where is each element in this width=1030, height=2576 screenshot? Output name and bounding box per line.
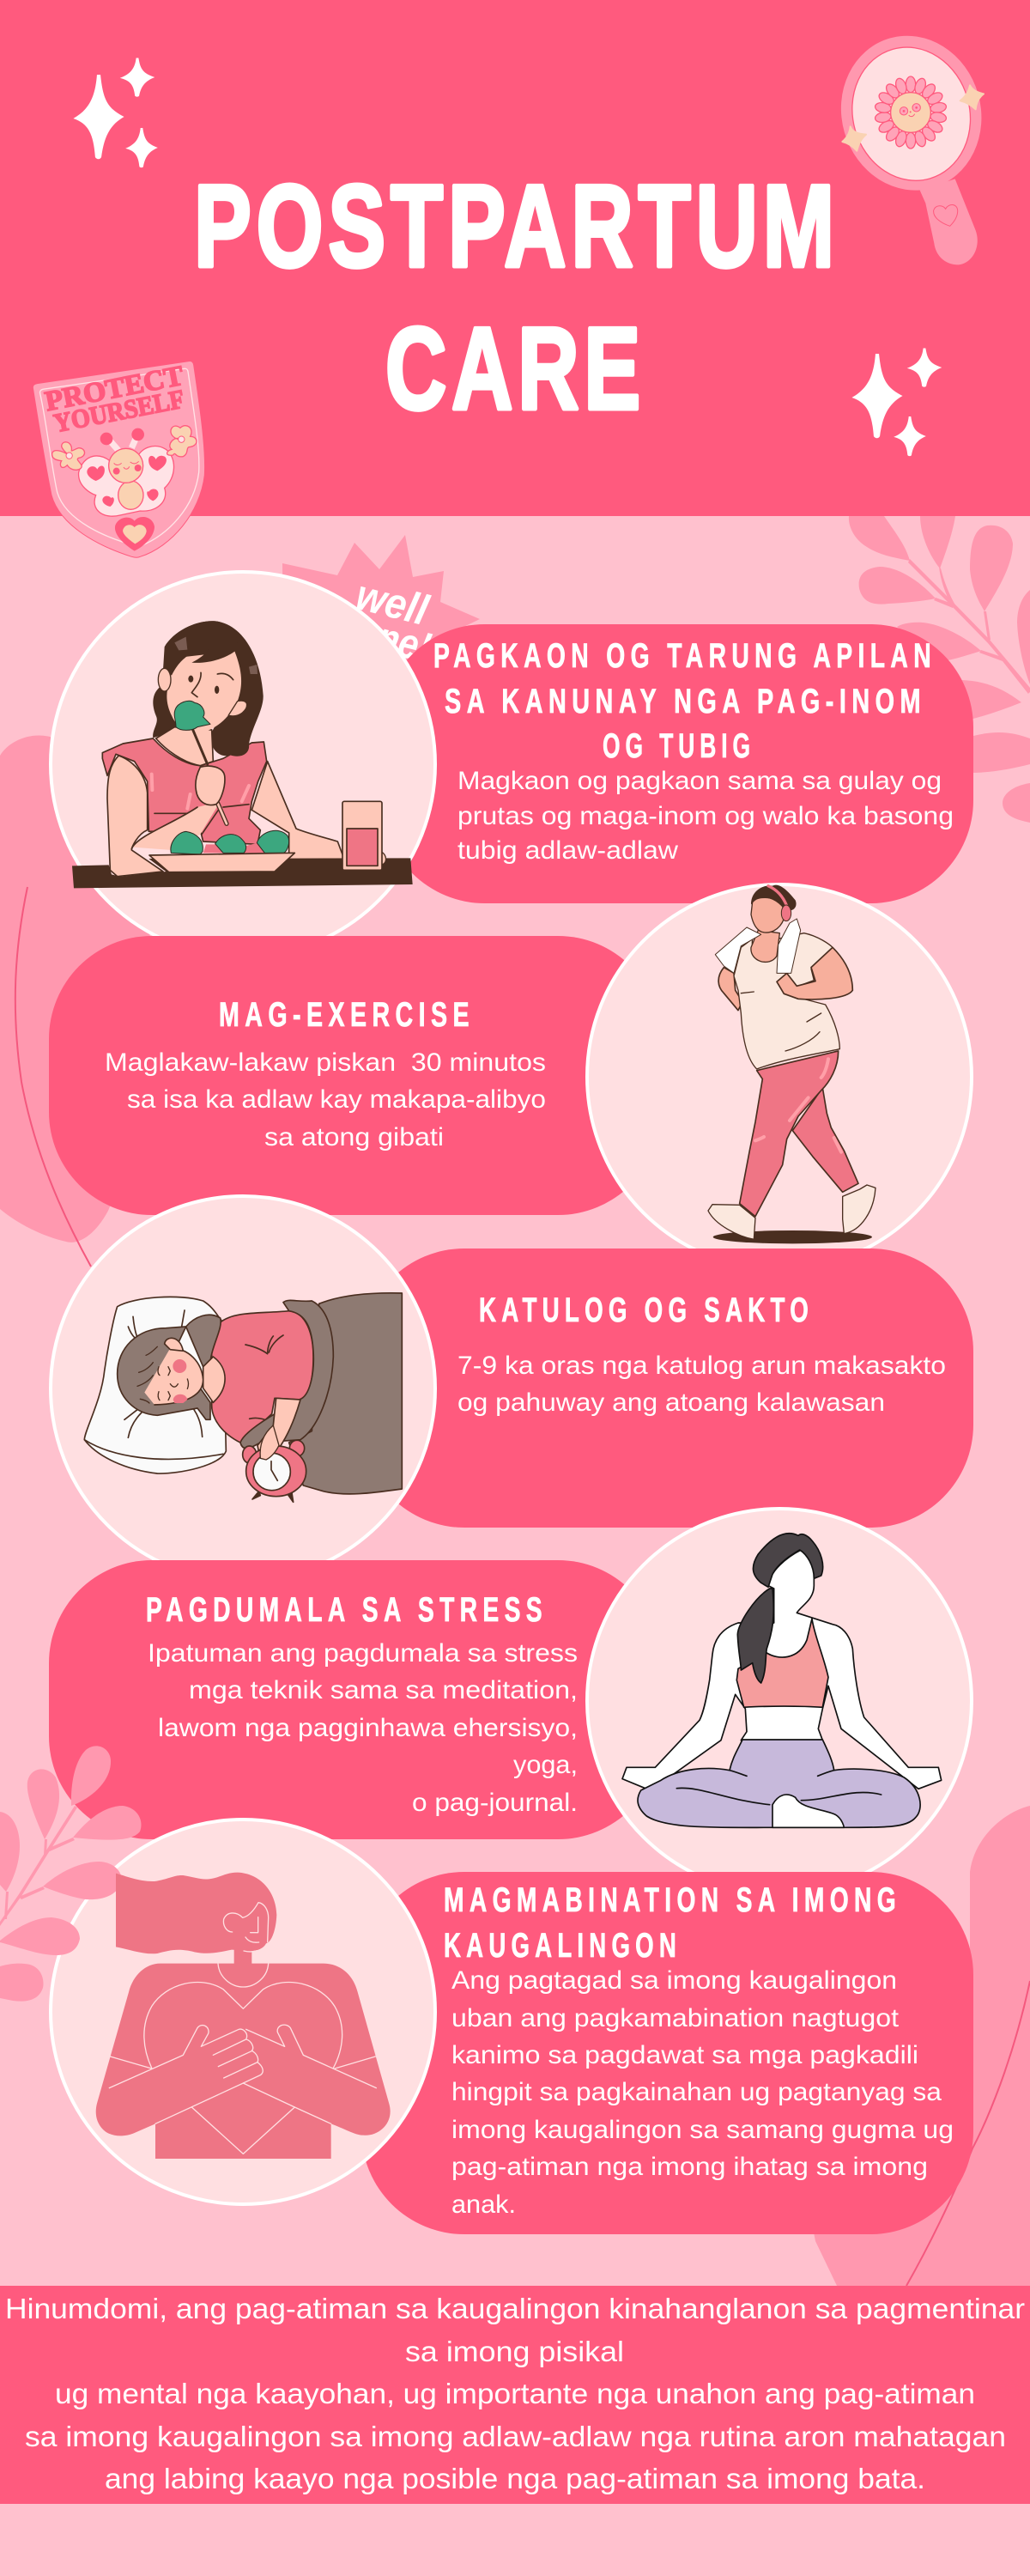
leggings [638, 1740, 920, 1827]
hand [196, 766, 225, 805]
card 4 body: yoga, [513, 1751, 578, 1779]
card 5 body: imong kaugalingon sa samang gugma ug [451, 2116, 954, 2144]
wing hearts [87, 466, 105, 481]
butterfly antennae [109, 435, 137, 451]
illustration: woman hugging heart [96, 1873, 391, 2159]
mirror handle [920, 179, 978, 264]
clock feet [252, 1492, 294, 1502]
eyes, brow, nose [188, 676, 193, 683]
card 5 heading: KAUGALINGON [444, 1927, 682, 1965]
butterfly body [118, 481, 143, 509]
arm [258, 1398, 300, 1460]
hand on clock [260, 1425, 279, 1460]
neck [234, 1929, 251, 1965]
illustration: woman walking [708, 885, 876, 1243]
card 5 body [451, 1966, 954, 2219]
card 2 body: Maglakaw-lakaw piskan 30 minutos [105, 1048, 546, 1077]
closing note text: Hinumdomi, ang pag-atiman sa kaugalingon kinahanglanon sa pagmentinar [5, 2293, 1025, 2324]
hair [753, 1534, 823, 1587]
card 1 heading [433, 637, 936, 765]
card 5 body: hingpit sa pagkainahan ug pagtanyag sa [451, 2078, 942, 2106]
card 4: stress management [49, 1560, 661, 1839]
leaves: top right [849, 516, 1030, 823]
closing note band [0, 2286, 1030, 2504]
card 2 heading: MAG-EXERCISE [219, 996, 475, 1034]
badge text: PROTECT [43, 361, 186, 417]
crop top [736, 1619, 828, 1707]
background curve line: bottom right [906, 1981, 1030, 2286]
shirt [212, 1311, 313, 1443]
card 4 body: o pag-journal. [412, 1789, 578, 1817]
flower petals [875, 76, 947, 149]
hand by the glass [380, 852, 386, 865]
card 1: food and water [382, 624, 973, 903]
card 5 heading [444, 1881, 901, 1965]
left arm [718, 968, 742, 1011]
right arm [777, 947, 852, 999]
blanket [289, 1293, 402, 1494]
card 2 body [105, 1048, 546, 1151]
butterfly wings [79, 447, 174, 516]
mirror glass [837, 33, 986, 195]
ponytail [737, 1589, 773, 1683]
closing note text: ang labing kaayo nga posible nga pag-atiman sa imong bata. [105, 2463, 925, 2494]
cheeks [173, 1359, 186, 1373]
title: CARE [385, 303, 645, 434]
neck [203, 1357, 225, 1402]
card 3 body: og pahuway ang atoang kalawasan [457, 1388, 885, 1417]
card 2 body: sa atong gibati [264, 1123, 444, 1151]
face [167, 651, 241, 732]
sticker text: well: well [351, 570, 433, 635]
sticker: well done: done! [330, 602, 436, 672]
forearm [133, 801, 221, 850]
closing note text [5, 2293, 1025, 2494]
sticker: well done [282, 535, 480, 678]
facial features [137, 1346, 189, 1403]
icon: sparkles top left [73, 58, 158, 167]
left arm [107, 756, 163, 877]
circle 5 [51, 1820, 435, 2204]
illustration: woman meditating [622, 1534, 942, 1827]
body silhouette [622, 1550, 942, 1789]
headphones [768, 886, 787, 906]
card 3 heading: KATULOG OG SAKTO [479, 1291, 814, 1329]
ears [158, 668, 171, 691]
shadow [713, 1230, 872, 1243]
card 4 body: Ipatuman ang pagdumala sa stress [148, 1639, 578, 1668]
card 4 body [148, 1639, 578, 1817]
foot [772, 1795, 844, 1827]
mirror frame [823, 19, 1000, 207]
shoes [708, 1205, 755, 1239]
badge text: YOURSELF [52, 384, 187, 438]
neck and chest [751, 930, 779, 962]
card 4 heading: PAGDUMALA SA STRESS [146, 1591, 548, 1629]
leaves: bottom left [0, 1746, 141, 2002]
food on plate [203, 843, 266, 853]
broccoli at mouth [174, 701, 210, 730]
peach stars [960, 85, 984, 109]
head [751, 897, 784, 933]
glass [342, 801, 382, 870]
ear [165, 1338, 183, 1351]
card 2: exercise [49, 936, 661, 1215]
card 1 body: prutas og maga-inom og walo ka basong [457, 802, 954, 830]
card 5 body: pag-atiman nga imong ihatag sa imong [451, 2153, 928, 2181]
heart at base [115, 517, 154, 551]
hair back [186, 1315, 221, 1367]
table [72, 858, 413, 888]
card 4 body: lawom nga pagginhawa ehersisyo, [158, 1714, 578, 1742]
icon: hand mirror [823, 19, 1000, 264]
circle 2 [587, 884, 972, 1269]
leg creases [676, 1771, 882, 1805]
shirt creases [245, 1335, 283, 1419]
torso and arms [96, 1964, 391, 2159]
card 1 heading: OG TUBIG [603, 727, 755, 765]
plate [149, 853, 294, 872]
towel [715, 927, 761, 973]
neck [156, 727, 213, 766]
back leg [792, 1088, 858, 1192]
face [144, 1348, 203, 1405]
badge text [43, 361, 187, 438]
front leg [740, 1051, 839, 1217]
illustration: woman eating [72, 621, 413, 888]
flowers [52, 426, 197, 470]
heart on handle [934, 205, 958, 226]
background blob: left [0, 735, 154, 1242]
circle 3 [51, 1196, 435, 1581]
pillow [84, 1297, 226, 1473]
hair [116, 1873, 276, 1953]
title [194, 161, 839, 434]
badge: protect yourself [33, 361, 205, 557]
card 3 body [457, 1352, 946, 1417]
hair [751, 885, 797, 910]
shield inner line [39, 368, 199, 547]
card 5 body: Ang pagtagad sa imong kaugalingon [451, 1966, 897, 1995]
card 1 body: Magkaon og pagkaon sama sa gulay og [457, 767, 942, 795]
card 2 body: sa isa ka adlaw kay makapa-alibyo [127, 1085, 546, 1114]
shirt [734, 933, 839, 1069]
fringe [163, 621, 238, 676]
card 4 body: mga teknik sama sa meditation, [189, 1676, 578, 1704]
clock [246, 1446, 306, 1497]
clock bells [289, 1440, 305, 1456]
icon: sparkles right [851, 349, 942, 456]
illustration: woman sleeping [84, 1293, 402, 1502]
circle 1 [51, 572, 435, 957]
fork [191, 727, 208, 764]
line art [109, 1903, 376, 2154]
background blob: bottom right [807, 1806, 1030, 2286]
header band [0, 0, 1030, 516]
closing note text: ug mental nga kaayohan, ug importante nga unahon ang pag-atiman [55, 2378, 975, 2409]
background curve line: left [15, 887, 91, 1267]
right arm [251, 762, 346, 865]
butterfly head [109, 448, 143, 483]
blanket fold [240, 1300, 333, 1449]
hair back [165, 621, 264, 756]
shield [33, 361, 205, 557]
card 5 body: uban ang pagkamabination nagtugot [451, 2004, 900, 2032]
dress [102, 738, 267, 844]
card 3 body: 7-9 ka oras nga katulog arun makasakto [457, 1352, 946, 1380]
card 1 body [457, 767, 954, 865]
flower face [891, 93, 930, 132]
card 5 body: kanimo sa pagdawat sa mga pagkadili [451, 2041, 918, 2069]
card 5: self-compassion [361, 1872, 973, 2234]
card 3: sleep [361, 1249, 973, 1528]
closing note text: sa imong pisikal [405, 2336, 624, 2367]
circle 4 [587, 1509, 972, 1893]
card 5 body: anak. [451, 2190, 516, 2219]
closing note text: sa imong kaugalingon sa imong adlaw-adlaw nga rutina aron mahatagan [25, 2421, 1006, 2452]
card 1 body: tubig adlaw-adlaw [457, 836, 678, 865]
